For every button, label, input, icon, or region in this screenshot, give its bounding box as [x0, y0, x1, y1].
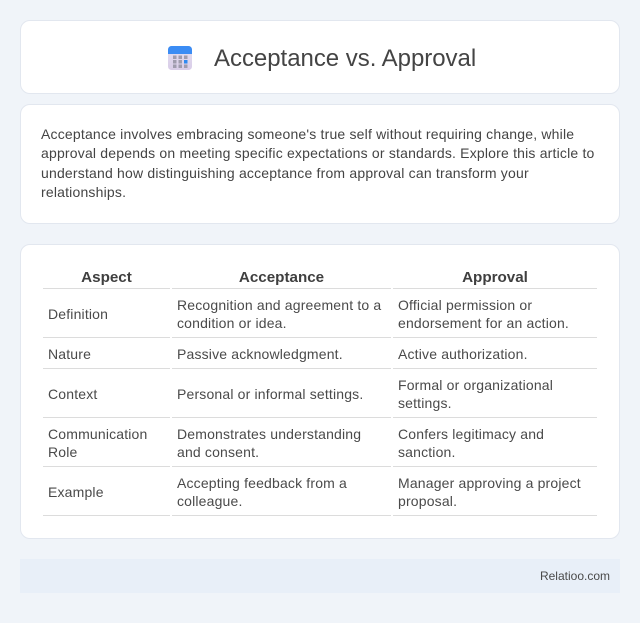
- row: Communication Role: Confers legitimacy and: [398, 426, 544, 442]
- text block: introduction: understand how distinguishing acceptance from approval can transform your: [41, 165, 529, 181]
- text block: introduction: approval depends on meeting specific expectations or standards. Explore this article to: [41, 145, 594, 161]
- table: comparison: Aspect: [81, 269, 132, 286]
- row: Definition: Official permission or: [398, 297, 532, 313]
- row: Definition: endorsement for an action.: [398, 315, 569, 331]
- row: Example: [48, 475, 581, 509]
- row: Example: Accepting feedback from a: [177, 475, 347, 491]
- text block: introduction: relationships.: [41, 184, 126, 200]
- row: Definition: [48, 297, 569, 331]
- row: Communication Role: Role: [48, 444, 77, 460]
- panel: header: [20, 20, 620, 94]
- row: Context: Formal or organizational: [398, 377, 553, 393]
- table: comparison: Approval: [462, 269, 528, 286]
- row: Definition: Recognition and agreement to a: [177, 297, 381, 313]
- row: Nature: Active authorization.: [398, 346, 528, 362]
- row: Context: settings.: [398, 395, 452, 411]
- row: Nature: [48, 346, 528, 362]
- panel: introduction: [20, 104, 620, 224]
- footer: [20, 559, 620, 593]
- row: Communication Role: sanction.: [398, 444, 456, 460]
- row: Nature: Passive acknowledgment.: [177, 346, 343, 362]
- row: Example: Example: [48, 484, 104, 500]
- panel: comparison table: [20, 244, 620, 539]
- row: Example: Manager approving a project: [398, 475, 581, 491]
- row: Communication Role: Communication: [48, 426, 147, 442]
- row: Definition: Definition: [48, 306, 108, 322]
- table: comparison: Acceptance: [239, 269, 324, 286]
- row: Communication Role: [48, 426, 544, 460]
- row: Communication Role: Demonstrates understanding: [177, 426, 361, 442]
- text block: introduction: [41, 126, 594, 200]
- row: Nature: Nature: [48, 346, 91, 362]
- icon: calendar: [168, 46, 192, 70]
- title: Acceptance vs. Approval: [214, 45, 476, 72]
- row: Communication Role: and consent.: [177, 444, 259, 460]
- row: Context: Context: [48, 386, 97, 402]
- row: Definition: condition or idea.: [177, 315, 287, 331]
- column headings: [81, 269, 528, 286]
- row: Example: colleague.: [177, 493, 243, 509]
- row: Context: Personal or informal settings.: [177, 386, 363, 402]
- row: Example: proposal.: [398, 493, 457, 509]
- footer credit: Relatioo.com: [540, 569, 610, 583]
- table: comparison: [81, 269, 528, 286]
- row: Context: [48, 377, 553, 411]
- text block: introduction: Acceptance involves embracing someone's true self without requiring change, while: [41, 126, 574, 142]
